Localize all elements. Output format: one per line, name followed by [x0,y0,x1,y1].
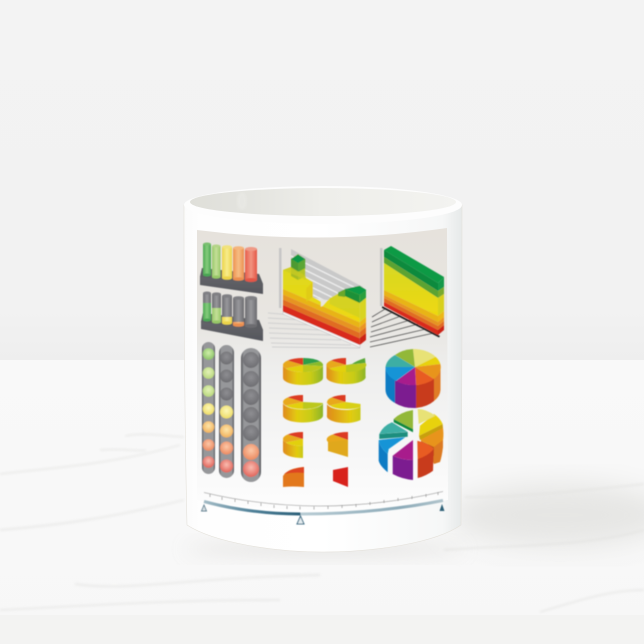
marble table [0,360,644,644]
front coloured bands [283,245,360,345]
floor lines [370,309,434,347]
left green column [291,254,305,280]
small pie 3 [283,395,323,423]
red slice [333,467,348,487]
red wedge [417,441,434,478]
half pie row 3 right [327,432,348,457]
right block light yellow face [330,290,360,318]
yellow step tops [283,267,306,280]
orange slice [283,467,304,487]
lower shelf with partly filled cylinders [201,292,263,341]
half pie row 3 left [283,432,303,458]
ruler scale [202,492,444,524]
full height 3D bar chart [370,246,444,347]
small pie 2: one wedge removed [326,358,366,384]
purple wedge [393,440,413,480]
ruler empty bar [300,500,443,514]
ruler filled bar [204,502,300,514]
teal wedge [379,422,408,439]
small pie 1: full [283,358,323,385]
right green block [338,286,366,303]
traffic light column 3 [241,348,261,482]
blue wedge [379,437,405,472]
mug infographic scene [184,186,644,552]
mug body [184,205,462,552]
left step side face [306,282,313,302]
pie sides [386,367,395,403]
upper shelf with coloured cylinders [200,242,263,294]
base black line [382,306,440,338]
ruler ticks [204,492,443,506]
chart faces [384,246,444,335]
small pie 4 [327,395,360,423]
background wall [0,0,644,362]
ruler markers [202,505,206,511]
green wedge [394,410,413,432]
back wall post [279,248,282,308]
base shadow line [283,312,360,348]
stepped 3D bar chart [268,245,370,348]
back wall post [380,248,382,306]
mug rim [184,186,462,224]
traffic light column 1 [202,342,215,474]
large 3D pie [386,349,441,408]
mug shadow [185,543,465,555]
traffic light column 2 [219,345,234,478]
right side face bands [360,290,366,345]
pie top wedges [413,349,436,367]
yellow wedge [419,414,443,440]
exploded 3D pie [379,409,443,480]
back grid wall [290,249,364,302]
floor lines [268,313,360,348]
pale yellow wedge [418,409,435,424]
mug interior [190,188,456,216]
printed panel [197,228,448,510]
orange wedge [420,426,443,464]
